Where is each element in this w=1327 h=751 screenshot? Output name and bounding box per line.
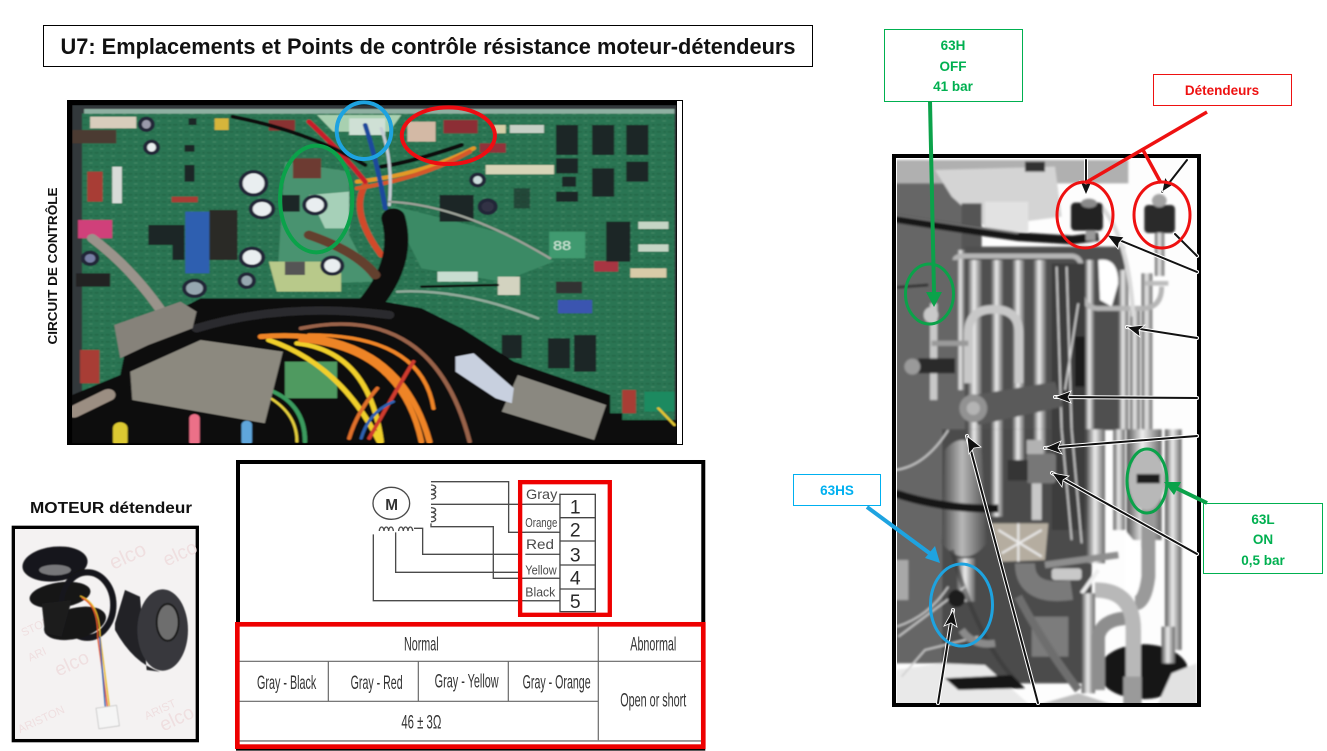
label: 63L: 63L [1251,512,1275,527]
arrow: détendeurs pointer lines [1085,112,1207,183]
panel: wiring diagram [237,462,703,749]
watermarks [16,537,201,736]
bottom dark pan [1098,644,1188,699]
resistance table: Gray - Black [257,673,317,694]
wire color labels: Red [526,536,554,552]
terminal block: 3 [570,545,581,566]
watermarks: ARIST [143,698,178,723]
connector [96,705,119,729]
circle: green component marker [280,146,352,252]
circle: red connector marker [402,107,495,164]
wires [80,596,109,707]
PCB components: blue capacitor block [185,158,321,273]
resistance table: Open or short [620,691,687,712]
translucent terminal [456,353,514,403]
red highlight: terminals [520,482,610,615]
terminal block: 5 [570,592,581,613]
lower pipes [1025,563,1072,591]
watermarks: elco [52,647,93,681]
resistance table: 46 ± 3Ω [401,712,441,733]
circle: détendeur left [1057,182,1113,248]
terminal block: 2 [570,521,581,542]
black cable [895,493,998,508]
circle: détendeur right [1134,182,1190,248]
resistance table: Gray - Yellow [435,671,499,692]
panel: motor photo [13,527,201,741]
label: 63H: OFF [940,59,966,74]
low pressure switch [1128,450,1165,510]
wire color labels: Yellow [525,563,557,577]
LED display [549,232,585,258]
panel: control circuit board photo [67,100,683,445]
detendeur bodies [1071,203,1103,231]
watermarks: ARISTON [16,704,67,736]
terminal block [560,494,595,613]
valve [1027,453,1056,483]
PCB components: red resistors [80,167,636,415]
terminal block: 1 [570,497,581,518]
watermarks: elco [157,702,198,736]
low-left wires and switch [897,587,978,677]
bottom white sheet [895,663,1032,707]
label: 63H [884,30,1022,102]
receiver [965,382,1063,425]
arrow: 63L to switch [1164,482,1207,503]
lower dark wiring area [72,298,610,443]
coil right [115,590,160,672]
title: U7: Emplacements et Points de contrôle résistance moteur-détendeurs [60,34,796,59]
wire color labels: Gray [526,486,557,502]
pipes [968,260,982,430]
label: 63HS: 63HS [820,483,854,498]
PCB components: connectors [72,117,674,412]
motor symbol and coils [373,482,560,601]
watermarks: ARI [26,646,48,664]
arrow: 63H to switch [926,101,942,307]
wire color labels [525,486,557,599]
label: 63L: ON [1253,532,1273,547]
label: 63L: 0,5 bar [1241,553,1286,568]
terminal block: 4 [570,568,581,589]
label: 63L [1204,504,1322,574]
black arrowheads [944,177,1176,627]
circle: 63L switch [1127,449,1167,513]
circle: 63H switch [906,264,954,324]
panel: wiring diagram: M [385,497,398,514]
watermarks: elco [106,538,150,575]
left device [930,303,937,400]
label: 63HS [794,474,880,506]
PCB components: DIP switches [148,118,648,372]
black pointer arrows [938,160,1197,703]
watermarks: elco [160,537,201,571]
LED display: 88 [553,239,571,254]
resistance table: Gray - Orange [523,672,591,693]
resistance table [237,624,703,747]
strainer cluster [992,523,1048,562]
label: 63H: 41 bar [933,79,974,94]
upper half of photo [895,160,1175,430]
lower half of photo [895,429,1197,710]
grey foam sleeves [114,302,606,440]
wire color labels: Black [525,585,556,599]
black cables [895,218,1098,240]
heading: moteur détendeur: MOTEUR détendeur [30,500,192,517]
coil left [21,543,113,646]
panel: refrigerant circuit photo [892,154,1201,710]
title [44,26,812,66]
label: détendeurs: Détendeurs [1185,83,1259,98]
wire color labels: Orange [525,516,557,530]
watermarks: STON [20,615,53,639]
receiver tank [942,440,987,557]
arrow: 63HS to switch [867,507,940,563]
resistance table: Gray - Red [351,673,403,694]
resistance table: Abnormal [630,635,676,656]
vertical label: circuit de contrôle: CIRCUIT DE CONTRÔLE [45,188,60,344]
resistance table: Normal [404,635,439,656]
circle: 63HS switch [930,564,992,646]
label: détendeurs [1154,74,1292,106]
wiring strip [1052,263,1085,430]
label: 63H: 63H [941,38,965,53]
circle: blue connector marker [337,102,391,159]
PCB components: capacitors [83,118,496,296]
wire bundle going down [74,117,674,442]
red highlight: table [237,624,703,747]
